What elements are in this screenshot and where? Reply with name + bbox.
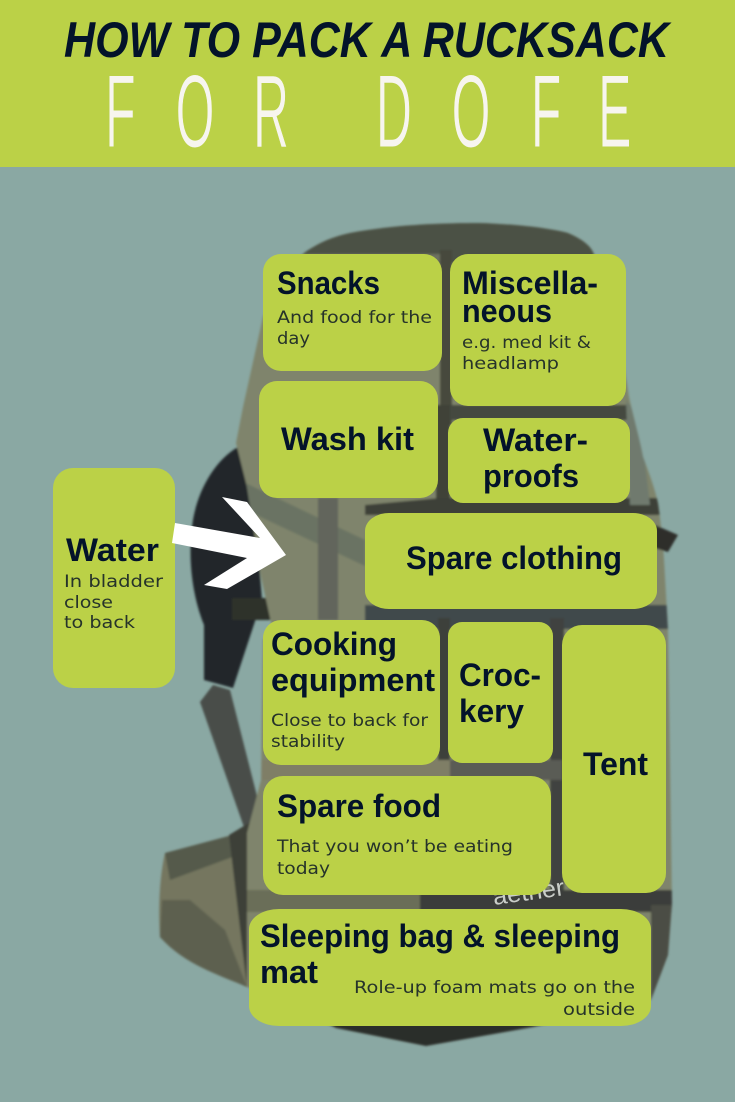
- note: spare food: That you won’t be eating: [276, 837, 513, 857]
- panel: miscellaneous: [450, 254, 626, 406]
- note: sleeping bag and mat: [354, 978, 635, 1020]
- heading: spare clothing: Spare clothing: [406, 540, 622, 576]
- rucksack brand mark: aether: [491, 874, 566, 911]
- note: cooking equipment: Close to back for: [271, 711, 428, 731]
- note: cooking equipment: [271, 711, 428, 752]
- panel: snacks: [263, 254, 442, 371]
- panel: water: [53, 468, 175, 688]
- panel: wash kit: [259, 381, 438, 498]
- heading: spare food: Spare food: [277, 788, 441, 824]
- note: miscellaneous: headlamp: [462, 354, 559, 374]
- heading: miscellaneous: [462, 265, 598, 329]
- note: miscellaneous: e.g. med kit &: [462, 333, 591, 353]
- note: sleeping bag and mat: outside: [563, 1000, 635, 1020]
- note: water: In bladder: [64, 572, 163, 592]
- heading: crockery: kery: [459, 693, 524, 729]
- heading: wash kit: Wash kit: [281, 421, 414, 457]
- heading: sleeping bag and mat: mat: [260, 954, 318, 990]
- heading: water: Water: [66, 532, 159, 568]
- heading: sleeping bag and mat: Sleeping bag & sleeping: [260, 918, 620, 954]
- note: water: close: [64, 593, 113, 613]
- heading: sleeping bag and mat: [260, 918, 620, 990]
- heading: snacks: Snacks: [277, 265, 380, 301]
- panel: waterproofs: [448, 418, 630, 503]
- heading: tent: Tent: [583, 746, 648, 782]
- arrow: water location: [172, 497, 286, 589]
- note: spare food: [276, 837, 513, 879]
- heading: miscellaneous: Miscella-: [462, 265, 598, 301]
- panel: cooking equipment: [263, 620, 440, 765]
- heading: crockery: Croc-: [459, 657, 541, 693]
- heading: waterproofs: proofs: [483, 458, 579, 494]
- rucksack illustration: [159, 215, 681, 1055]
- note: spare food: today: [277, 859, 330, 879]
- note: sleeping bag and mat: Role-up foam mats go on the: [354, 978, 635, 998]
- note: water: to back: [64, 613, 135, 633]
- note: miscellaneous: [462, 333, 591, 374]
- note: cooking equipment: stability: [271, 732, 345, 752]
- subtitle: FOR DOFE: [105, 54, 631, 170]
- note: snacks: [277, 308, 432, 349]
- heading: cooking equipment: Cooking: [271, 626, 397, 662]
- header banner: [0, 0, 735, 170]
- note: snacks: day: [277, 329, 310, 349]
- heading: crockery: [459, 657, 541, 729]
- panel: tent: [562, 625, 666, 893]
- panel: crockery: [448, 622, 553, 763]
- heading: cooking equipment: [271, 626, 435, 698]
- heading: waterproofs: Water-: [483, 422, 588, 458]
- panel: sleeping bag and mat: [249, 909, 651, 1026]
- heading: cooking equipment: equipment: [271, 662, 435, 698]
- note: snacks: And food for the: [277, 308, 432, 328]
- heading: waterproofs: [483, 422, 588, 494]
- heading: miscellaneous: neous: [462, 293, 552, 329]
- panel: spare food: [263, 776, 551, 895]
- note: water: [64, 572, 163, 633]
- panel: spare clothing: [365, 513, 657, 609]
